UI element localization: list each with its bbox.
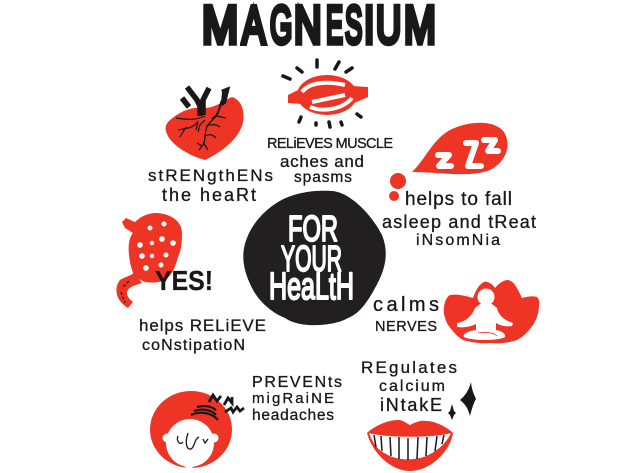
icon: lotus with meditating figure	[444, 280, 539, 343]
central text: FOR	[288, 208, 338, 249]
text: prevents migraine headaches: PREVENts	[252, 374, 342, 391]
icon: muscle	[283, 60, 368, 127]
text: regulates calcium intake: iNtakE	[380, 395, 442, 415]
text: prevents migraine headaches: migRaiNE	[252, 390, 334, 407]
text: calms nerves	[373, 294, 439, 335]
text: relieves muscle aches and spasms	[267, 136, 393, 186]
text: helps to fall asleep and treat insomnia: helps to fall	[405, 189, 512, 210]
icon: stomach	[116, 213, 182, 308]
text: strengthens the heart: the heaRt	[162, 185, 256, 205]
text: regulates calcium intake	[361, 358, 457, 415]
central text	[269, 208, 354, 308]
text: yes!: YES!	[155, 265, 213, 296]
title	[202, 0, 436, 55]
central text: HeaLtH	[269, 266, 354, 308]
icon: heart	[166, 87, 244, 160]
text: strengthens the heart: stRENgthENs	[148, 166, 273, 185]
text: helps relieve constipation: helps RELiEVE	[139, 316, 266, 335]
text: strengthens the heart	[148, 166, 273, 205]
text: regulates calcium intake: REgulates	[361, 358, 457, 377]
central blob	[243, 191, 386, 325]
text: helps relieve constipation: coNstipatioN	[142, 337, 245, 354]
text: prevents migraine headaches	[252, 374, 342, 424]
icon: sleep speech bubble	[389, 123, 508, 201]
text: regulates calcium intake: calcium	[379, 378, 445, 395]
text: relieves muscle aches and spasms: aches and	[280, 152, 364, 171]
text: prevents migraine headaches: headaches	[252, 407, 334, 424]
text: helps relieve constipation	[139, 316, 266, 354]
text: helps to fall asleep and treat insomnia: asleep and tReat	[382, 212, 536, 232]
icon: sparkles	[448, 382, 476, 420]
icon: smiling lips	[367, 420, 453, 471]
icon: migraine head	[150, 391, 244, 470]
text: relieves muscle aches and spasms: RELiEVES MUSCLE	[267, 136, 393, 152]
text: helps to fall asleep and treat insomnia	[382, 189, 536, 249]
text: calms nerves: NERVES	[375, 319, 437, 335]
central text: YOUR	[281, 238, 342, 279]
text: helps to fall asleep and treat insomnia: iNsomNia	[416, 232, 500, 249]
text: relieves muscle aches and spasms: spasms	[294, 169, 352, 186]
text: calms nerves: calms	[373, 294, 439, 316]
